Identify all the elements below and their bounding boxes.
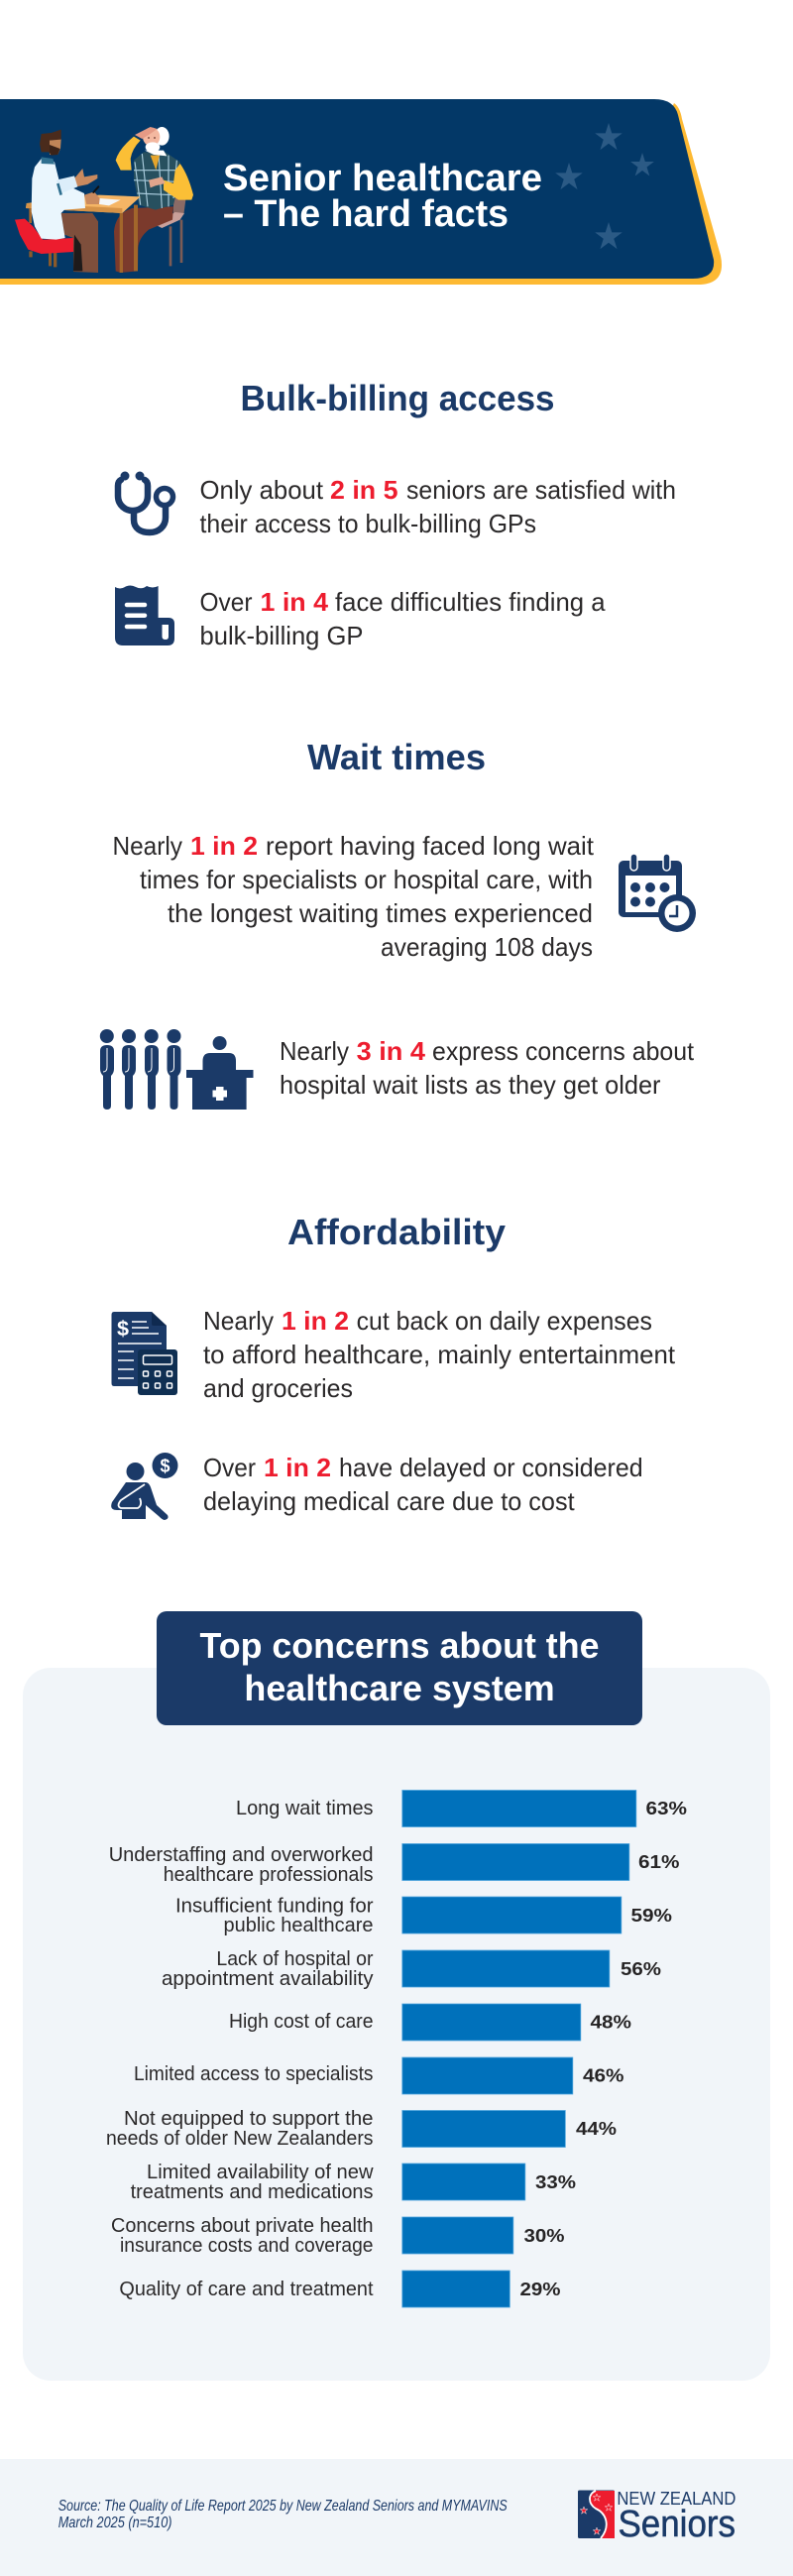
text: 1 in 2 long waits: times for specialists or hospital care, with bbox=[140, 865, 593, 894]
text: 1 in 2 cut back bbox=[203, 1306, 676, 1403]
bar labels: Insufficient funding for bbox=[175, 1894, 374, 1918]
icon: bill and calculator: $ bbox=[117, 1318, 129, 1341]
section: wait times bbox=[100, 737, 696, 1110]
banner title bbox=[223, 158, 542, 235]
text: 1 in 4 difficulties bbox=[200, 587, 606, 650]
bar labels: treatments and medications bbox=[131, 2180, 373, 2203]
icon: calendar and clock bbox=[619, 854, 696, 932]
text: 3 in 4 hospital wait lists bbox=[280, 1036, 695, 1100]
bar values: 48% bbox=[591, 2011, 631, 2033]
heading: wait times: Wait times bbox=[307, 737, 486, 777]
banner stars bbox=[555, 123, 654, 249]
text: 1 in 2 delayed care: delaying medical care due to cost bbox=[203, 1486, 575, 1516]
text: 1 in 2 delayed care bbox=[203, 1453, 643, 1516]
heading box: top concerns: healthcare system bbox=[244, 1668, 555, 1708]
text: 1 in 4 difficulties: 1 in 4 bbox=[260, 587, 329, 617]
bar values: 59% bbox=[630, 1905, 672, 1926]
bar labels: Not equipped to support the bbox=[124, 2107, 373, 2130]
bar values: 44% bbox=[576, 2118, 617, 2139]
bar values: 61% bbox=[638, 1851, 680, 1872]
text: 2 in 5 satisfied: their access to bulk-billing GPs bbox=[200, 509, 536, 538]
text: 1 in 4 difficulties: face difficulties finding a bbox=[335, 587, 606, 617]
bar values: 63% bbox=[646, 1798, 687, 1818]
banner title: Senior healthcare bbox=[223, 158, 542, 199]
text: 1 in 2 cut back: Nearly bbox=[203, 1306, 274, 1336]
text: 1 in 2 delayed care: Over bbox=[203, 1453, 256, 1482]
text: 2 in 5 satisfied: Only about bbox=[200, 475, 324, 505]
text: 3 in 4 hospital wait lists: hospital wait lists as they get older bbox=[280, 1070, 661, 1100]
icon: person with arm in sling and dollar: $ bbox=[160, 1456, 170, 1475]
icon: people queueing at hospital desk bbox=[100, 1029, 254, 1110]
section: affordability bbox=[111, 1212, 676, 1520]
text: 1 in 4 difficulties: bulk-billing GP bbox=[200, 621, 363, 650]
logo: New Zealand Seniors: NEW ZEALAND bbox=[617, 2489, 736, 2509]
bar labels: Lack of hospital or bbox=[216, 1947, 374, 1970]
bar chart bbox=[106, 1791, 687, 2307]
bars bbox=[402, 1791, 636, 2307]
text: 1 in 2 long waits: averaging 108 days bbox=[381, 932, 593, 962]
text: 1 in 2 delayed care: have delayed or considered bbox=[339, 1453, 643, 1482]
bar labels: Quality of care and treatment bbox=[119, 2278, 374, 2300]
bar values: 46% bbox=[583, 2064, 624, 2086]
icon: person with arm in sling and dollar bbox=[111, 1453, 178, 1520]
bar labels: Understaffing and overworked bbox=[109, 1843, 373, 1866]
bar values: 56% bbox=[621, 1958, 661, 1979]
bar values: 29% bbox=[519, 2279, 561, 2299]
bar values: 30% bbox=[523, 2225, 565, 2246]
bar labels: Limited access to specialists bbox=[134, 2062, 373, 2085]
bar labels: public healthcare bbox=[224, 1914, 373, 1936]
source note: Source: The Quality of Life Report 2025 by New Zealand Seniors and MYMAVINS bbox=[58, 2498, 508, 2515]
illustration: doctor and senior patient bbox=[15, 127, 193, 273]
bar values bbox=[519, 1798, 687, 2299]
bar labels bbox=[106, 1797, 374, 2300]
section: bulk-billing access bbox=[115, 378, 676, 650]
text: 2 in 5 satisfied: seniors are satisfied with bbox=[406, 475, 676, 505]
text: 1 in 2 long waits: report having faced long wait bbox=[266, 831, 595, 861]
source note bbox=[58, 2498, 508, 2531]
text: 1 in 4 difficulties: Over bbox=[200, 587, 253, 617]
bar labels: healthcare professionals bbox=[164, 1863, 373, 1886]
text: 1 in 2 long waits: 1 in 2 bbox=[190, 831, 258, 861]
heading box: top concerns: Top concerns about the bbox=[200, 1625, 599, 1666]
bar labels: Concerns about private health bbox=[111, 2214, 373, 2237]
bar labels: High cost of care bbox=[229, 2010, 373, 2033]
logo: New Zealand Seniors: Seniors bbox=[619, 2504, 736, 2545]
text: 1 in 2 long waits bbox=[113, 831, 595, 962]
text: 1 in 2 long waits: the longest waiting times experienced bbox=[168, 898, 593, 928]
text: 3 in 4 hospital wait lists: Nearly bbox=[280, 1036, 349, 1066]
source note: March 2025 (n=510) bbox=[58, 2515, 172, 2531]
footer bbox=[0, 2459, 793, 2576]
logo: New Zealand Seniors bbox=[578, 2489, 736, 2545]
text: 3 in 4 hospital wait lists: 3 in 4 bbox=[357, 1036, 426, 1066]
banner title: – The hard facts bbox=[223, 193, 509, 235]
icon: stethoscope bbox=[118, 474, 172, 532]
text: 1 in 2 cut back: to afford healthcare, mainly entertainment bbox=[203, 1340, 676, 1369]
bar labels: insurance costs and coverage bbox=[120, 2234, 373, 2257]
bar labels: needs of older New Zealanders bbox=[106, 2127, 373, 2150]
text: 1 in 2 long waits: Nearly bbox=[113, 831, 182, 861]
text: 2 in 5 satisfied bbox=[200, 475, 676, 538]
text: 1 in 2 cut back: and groceries bbox=[203, 1373, 353, 1403]
text: 3 in 4 hospital wait lists: express concerns about bbox=[432, 1036, 695, 1066]
panel: top concerns chart bbox=[23, 1611, 770, 2381]
bar labels: Limited availability of new bbox=[147, 2161, 374, 2183]
bar labels: appointment availability bbox=[162, 1967, 374, 1990]
text: 1 in 2 delayed care: 1 in 2 bbox=[264, 1453, 331, 1482]
icon: clipboard bbox=[115, 585, 174, 645]
icon: bill and calculator bbox=[111, 1312, 177, 1395]
bar labels: Long wait times bbox=[236, 1797, 373, 1819]
header banner bbox=[0, 99, 722, 285]
text: 2 in 5 satisfied: 2 in 5 bbox=[330, 475, 398, 505]
text: 1 in 2 cut back: 1 in 2 bbox=[282, 1306, 349, 1336]
heading: bulk-billing access: Bulk-billing access bbox=[240, 378, 555, 418]
bar values: 33% bbox=[535, 2171, 576, 2192]
heading box: top concerns bbox=[157, 1611, 642, 1725]
text: 1 in 2 cut back: cut back on daily expenses bbox=[357, 1306, 652, 1336]
heading: affordability: Affordability bbox=[287, 1212, 506, 1252]
